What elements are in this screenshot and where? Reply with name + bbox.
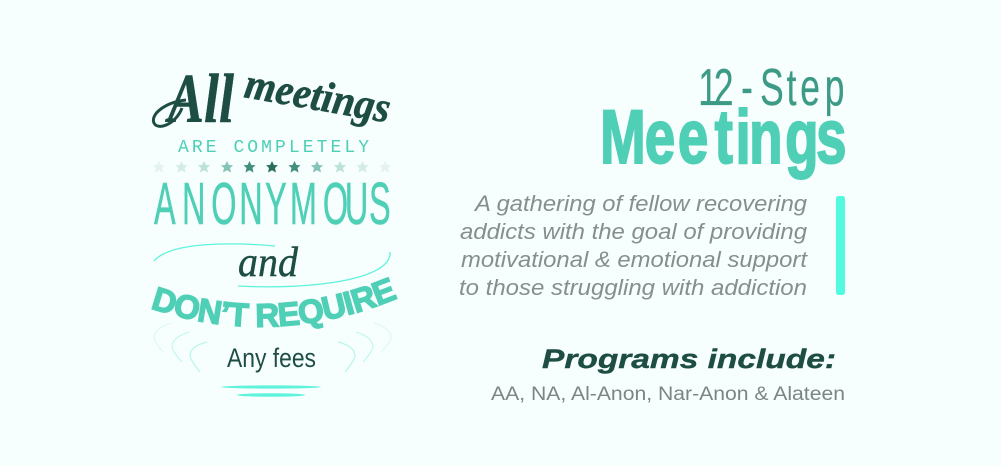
text: don't require: DON’T REQUIRE: [151, 276, 398, 329]
description text: to those struggling with addiction: [459, 275, 807, 300]
text: are completely: ARE COMPLETELY: [178, 138, 369, 158]
text: any fees: Any fees: [227, 343, 316, 373]
subheading: programs include: Programs include:: [542, 344, 836, 374]
description text: A gathering of fellow recovering: [473, 191, 808, 216]
bottom swash lines: [221, 385, 321, 397]
panel: left typographic quote: [151, 61, 398, 397]
description text: [459, 191, 808, 300]
decorative brackets: [154, 323, 391, 372]
script heading: All meetings: meetings: [241, 61, 394, 132]
decorative swash below and: [238, 252, 390, 287]
accent bar: [836, 196, 845, 295]
programs list: AA, NA, Al-Anon, Nar-Anon & Alateen: [491, 384, 845, 405]
title: [600, 59, 847, 180]
description text: motivational & emotional support: [461, 247, 808, 272]
description text: addicts with the goal of providing: [460, 219, 808, 244]
script heading: All meetings: All: [165, 61, 234, 138]
title line: Meetings: Meetings: [600, 95, 847, 180]
title line: 12-Step: 12-Step: [698, 59, 844, 117]
script word: and: and: [238, 240, 299, 286]
script heading: All meetings: [153, 61, 394, 138]
panel: right content: [459, 59, 847, 405]
row of stars: [153, 161, 391, 172]
text: anonymous: ANONYMOUS: [154, 172, 391, 238]
decorative swash above and: [154, 244, 275, 261]
